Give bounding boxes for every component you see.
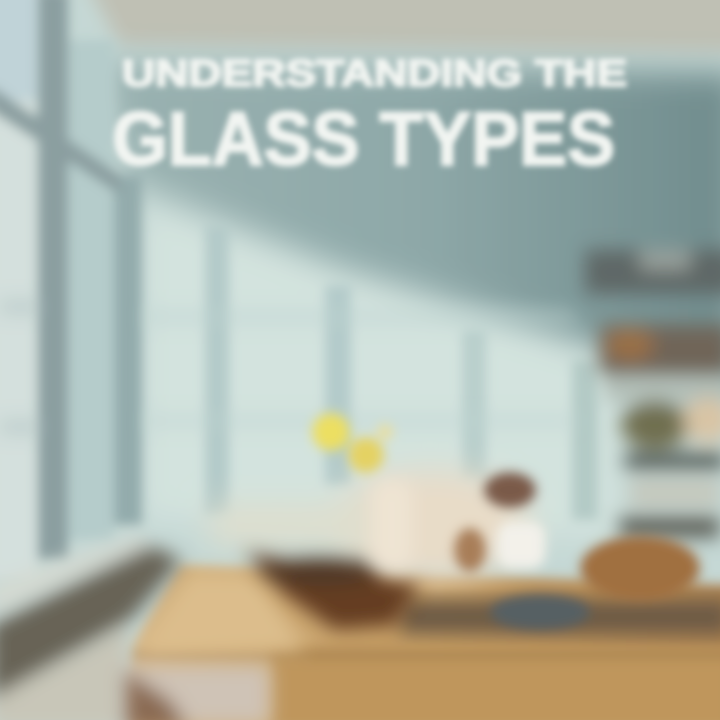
title: [112, 53, 627, 182]
panel: wooden table: [130, 565, 720, 720]
icon: wooden bowl: [245, 552, 420, 630]
panel: foreground railing: [0, 535, 182, 720]
icon: yellow flowers: [312, 413, 393, 473]
panel: counter clutter glow: [210, 470, 530, 580]
panel: glass horizontal bands: [0, 300, 575, 434]
panel: ceiling: [85, 0, 720, 52]
panel: floor objects: [120, 665, 270, 720]
panel: right shelves: [585, 250, 720, 538]
icon: white cup and brown objects: [454, 472, 700, 630]
heading: GLASS TYPES: [112, 97, 615, 182]
subtitle line: UNDERSTANDING THE: [122, 53, 627, 95]
panel: dark counter strip: [400, 600, 720, 634]
panel: window mullions: [0, 0, 598, 580]
panel: table top highlight: [135, 575, 305, 655]
icon: vase: [372, 480, 412, 570]
panel: upper teal wall: [100, 62, 720, 390]
